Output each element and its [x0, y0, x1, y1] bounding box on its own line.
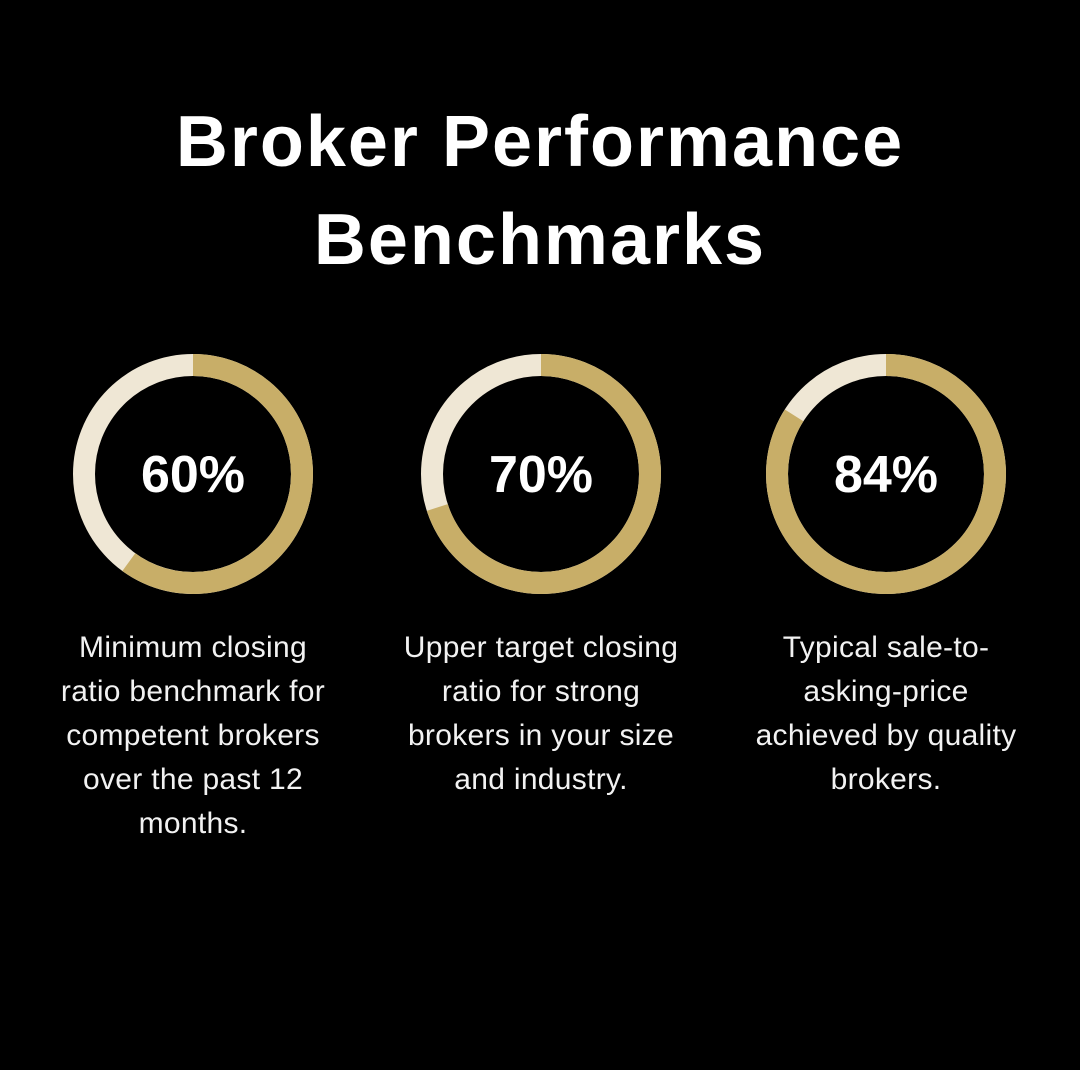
text: 70% description: brokers in your size [408, 719, 674, 752]
text: 60% description: ratio benchmark for [61, 675, 325, 708]
donut: 60% [73, 354, 313, 594]
text: 84% description: asking-price [803, 675, 969, 708]
title: Benchmarks [314, 200, 766, 280]
text: 70% description: Upper target closing [404, 631, 678, 664]
text: 84% description: brokers. [831, 763, 941, 796]
donut: 60%: 60% [141, 446, 245, 504]
donut: 84% [766, 354, 1006, 594]
text: 60% description: over the past 12 [83, 763, 303, 796]
text: 60% description: competent brokers [66, 719, 320, 752]
donut: 70% [421, 354, 661, 594]
text: 60% description: months. [139, 807, 247, 840]
text: 84% description [756, 631, 1016, 796]
donut: 70%: 70% [489, 446, 593, 504]
text: 84% description: achieved by quality [756, 719, 1016, 752]
text: 70% description: ratio for strong [442, 675, 640, 708]
donut: 84%: 84% [834, 446, 938, 504]
text: 70% description: and industry. [454, 763, 628, 796]
title [176, 102, 904, 280]
title: Broker Performance [176, 102, 904, 182]
text: 60% description: Minimum closing [79, 631, 307, 664]
text: 70% description [404, 631, 678, 796]
text: 84% description: Typical sale-to- [783, 631, 989, 664]
text: 60% description [61, 631, 325, 840]
